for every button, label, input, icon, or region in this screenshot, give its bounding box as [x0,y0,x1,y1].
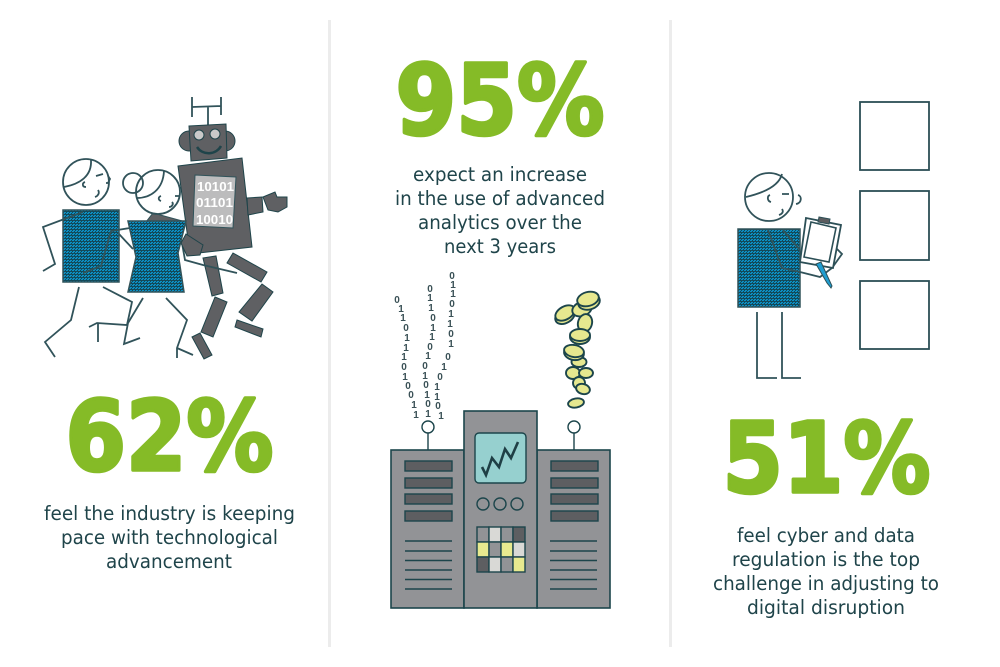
illustration: binary streams: 011011010101101 [434,271,456,422]
text: 95% description: analytics over the [418,211,582,234]
chart screen [475,433,526,483]
text: binary on robot chest: 10010 [196,212,233,227]
checklist boxes [860,102,929,349]
illustration: binary streams [394,271,456,422]
icon: woman figure [123,170,237,358]
illustration: two people with a robot [43,97,287,359]
stat: 51%: 51% [722,402,930,515]
panel: right, 51 percent [713,102,939,619]
text: binary on robot chest: 10101 [197,179,234,194]
person [738,173,842,378]
illustration: binary streams: 0110111010011 [394,295,419,421]
illustration: person with clipboard and checklist [738,102,929,378]
text: 95% description [395,163,605,258]
text: 95% description: expect an increase [413,163,587,186]
button grid [477,527,525,572]
stat: 95%: 95% [396,44,604,157]
panel: middle, 95 percent [391,44,610,608]
text: 51% description: digital disruption [747,596,905,619]
text: 51% description: feel cyber and data [737,524,915,547]
text: binary on robot chest [196,179,234,227]
icon: robot [178,97,287,359]
text: 51% description: challenge in adjusting to [713,572,939,595]
text: 62% description: feel the industry is keeping [44,502,295,525]
illustration: server machine [391,411,610,608]
text: 51% description: regulation is the top [732,548,920,571]
stat: 62%: 62% [66,380,274,493]
clipboard [800,217,841,268]
text: 95% description: next 3 years [444,235,556,258]
panel: left, 62 percent [43,97,295,573]
text: 62% description: pace with technological [61,526,278,549]
illustration: binary streams: 01101101010101 [422,284,436,420]
text: 51% description [713,524,939,619]
pen [816,262,832,288]
text: 62% description: advancement [106,550,232,573]
icon: man figure [43,159,133,357]
text: binary on robot chest: 01101 [196,195,233,210]
text: 62% description [44,502,295,573]
text: 95% description: in the use of advanced [395,187,605,210]
illustration: floating coins [552,289,602,409]
